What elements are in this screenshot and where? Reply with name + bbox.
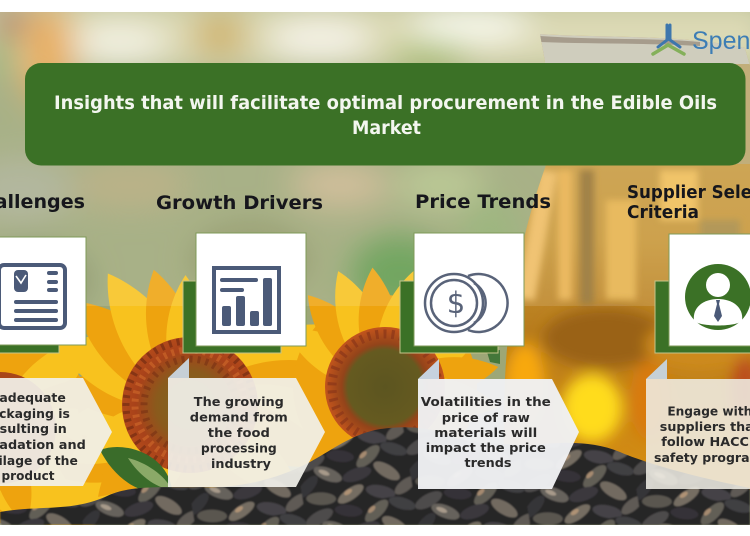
- column: challenges: [0, 191, 112, 486]
- column: growth drivers: [156, 192, 325, 487]
- callout: growth drivers: the food: [208, 425, 270, 440]
- stem leaf by price card: [487, 350, 500, 364]
- callout: growth drivers: [168, 358, 325, 487]
- icon card: newspaper: [0, 237, 86, 353]
- callout: growth drivers: industry: [211, 456, 271, 471]
- callout: price trends: [418, 359, 579, 489]
- callout: price trends: trends: [464, 455, 512, 470]
- callout: price trends: impact the price: [426, 440, 546, 455]
- sunflower left edge: [0, 298, 145, 533]
- pile of sunflower seeds: [0, 420, 750, 525]
- paler photo overlay above the step line: [0, 12, 750, 306]
- callout: challenges: [0, 378, 112, 486]
- sunflower leaf: [100, 447, 172, 493]
- callout: growth drivers: processing: [201, 440, 277, 456]
- icon card: coins: [400, 233, 524, 353]
- sunflower centre-right: [276, 263, 502, 479]
- heading: supplier selection criteria: Criteria: [627, 202, 699, 223]
- sunflower centre-left: [44, 260, 357, 527]
- title: Insights that will facilitate optimal procurement in the Edible Oils: [54, 92, 717, 114]
- icon: report chart: [214, 268, 279, 332]
- callout: growth drivers: demand from: [190, 410, 288, 424]
- column: supplier selection criteria: [627, 182, 750, 489]
- callout: supplier selection criteria: [646, 359, 750, 489]
- logo mark: [653, 25, 684, 54]
- callout: challenges: product: [2, 468, 55, 483]
- title banner: [25, 63, 746, 166]
- column: price trends: [400, 191, 579, 489]
- callout: growth drivers: The growing: [194, 394, 284, 409]
- icon card: supplier person: [655, 234, 750, 353]
- heading: growth drivers: Growth Drivers: [156, 192, 323, 214]
- oil jug: [504, 32, 750, 490]
- icon: coins: $: [447, 286, 465, 320]
- callout: price trends: Volatilities in the: [421, 394, 551, 409]
- callout: price trends: price of raw: [442, 410, 530, 425]
- icon card: report chart: [183, 233, 306, 353]
- icon: supplier person: [685, 264, 750, 330]
- icon: newspaper: [0, 265, 65, 328]
- heading: price trends: Price Trends: [415, 191, 551, 213]
- callout: price trends: materials will: [434, 425, 537, 440]
- logo: Spend Edge mark and cropped wordmark: [653, 25, 750, 55]
- title: Market: [352, 117, 421, 139]
